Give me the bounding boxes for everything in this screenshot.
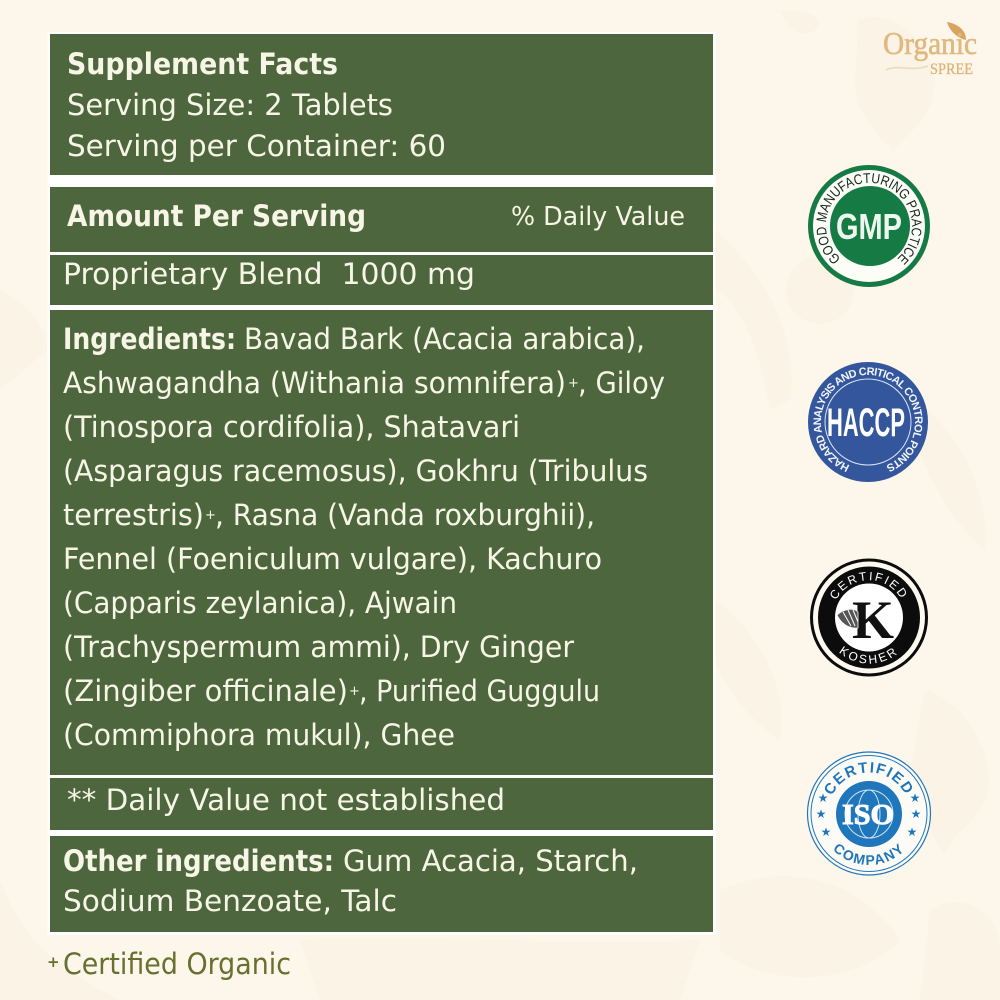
panel: daily value note bbox=[50, 778, 713, 830]
ingredients list: (Commiphora mukul), Ghee bbox=[63, 718, 455, 752]
ingredients list: , Giloy bbox=[578, 366, 665, 400]
badge: ISO: ★ bbox=[907, 825, 917, 839]
badge: ISO: ★ bbox=[818, 791, 828, 805]
badge: ISO: CERTIFIED bbox=[824, 762, 912, 794]
logo: Organic Spree bbox=[883, 22, 977, 78]
heading: Supplement Facts: Supplement Facts bbox=[67, 47, 338, 81]
heading: Amount Per Serving: Amount Per Serving bbox=[67, 199, 366, 233]
ingredients list: , Purified Guggulu bbox=[359, 674, 600, 708]
logo: Organic Spree: SPREE bbox=[930, 61, 973, 78]
badge: ISO: ★ bbox=[821, 825, 831, 839]
other ingredients label: Other ingredients: bbox=[63, 844, 334, 878]
ingredients list: + bbox=[205, 508, 216, 523]
badge: ISO: ★ bbox=[816, 807, 826, 821]
ingredients list: Bavad Bark (Acacia arabica), bbox=[244, 322, 645, 356]
note text: ** Daily Value not established bbox=[67, 783, 505, 817]
ingredients list: (Tinospora cordifolia), Shatavari bbox=[63, 410, 520, 444]
badge: HACCP: HAZARD ANALYSIS AND CRITICAL CONTROL POINTS bbox=[813, 367, 923, 472]
footnote: certified organic: + bbox=[47, 953, 60, 971]
badge: Kosher: CERTIFIED bbox=[830, 572, 906, 598]
panel: ingredients bbox=[50, 310, 713, 775]
footnote: certified organic: Certified Organic bbox=[63, 947, 291, 981]
ingredients list: (Capparis zeylanica), Ajwain bbox=[63, 586, 457, 620]
panel: amount per serving bbox=[50, 187, 713, 252]
other ingredients first line: Gum Acacia, Starch, bbox=[343, 844, 638, 878]
badge: ISO: COMPANY bbox=[834, 843, 902, 865]
badge: GMP: GOOD MANUFACTURING PRACTICE bbox=[816, 173, 922, 265]
badge: Kosher: K bbox=[852, 590, 894, 650]
badge: ISO: ISO bbox=[842, 800, 894, 831]
ingredients list: Ashwagandha (Withania somnifera) bbox=[63, 366, 566, 400]
blend amount: Proprietary Blend 1000 mg bbox=[63, 257, 475, 291]
table frame bbox=[48, 32, 716, 935]
badge: ISO: ★ bbox=[910, 791, 920, 805]
% daily value label: % Daily Value bbox=[511, 202, 685, 232]
ingredients list bbox=[63, 322, 665, 752]
ingredients list: (Trachyspermum ammi), Dry Ginger bbox=[63, 630, 575, 664]
ingredients list: (Asparagus racemosus), Gokhru (Tribulus bbox=[63, 454, 648, 488]
panel: other ingredients bbox=[50, 836, 713, 932]
badge: GMP: GMP bbox=[836, 206, 902, 247]
panel: supplement facts header bbox=[50, 34, 713, 175]
badge: ISO: ★ bbox=[911, 807, 921, 821]
serving size: Serving Size: 2 Tablets bbox=[67, 88, 393, 122]
badge: ISO bbox=[806, 751, 932, 876]
servings per container: Serving per Container: 60 bbox=[67, 129, 446, 163]
badge: HACCP: HACCP bbox=[827, 401, 905, 445]
ingredients list: + bbox=[568, 376, 579, 391]
logo: Organic Spree: Organic bbox=[883, 25, 977, 61]
badge: Kosher bbox=[810, 558, 928, 676]
ingredients list: Fennel (Foeniculum vulgare), Kachuro bbox=[63, 542, 602, 576]
ingredients list: + bbox=[349, 684, 360, 699]
badge: Kosher: KOSHER bbox=[839, 646, 897, 664]
ingredients list: Ingredients: bbox=[63, 322, 236, 356]
ingredients list: (Zingiber officinale) bbox=[63, 674, 348, 708]
other ingredients second line: Sodium Benzoate, Talc bbox=[63, 884, 397, 918]
ingredients list: , Rasna (Vanda roxburghii), bbox=[215, 498, 595, 532]
ingredients list: terrestris) bbox=[63, 498, 204, 532]
panel: proprietary blend bbox=[50, 255, 713, 305]
